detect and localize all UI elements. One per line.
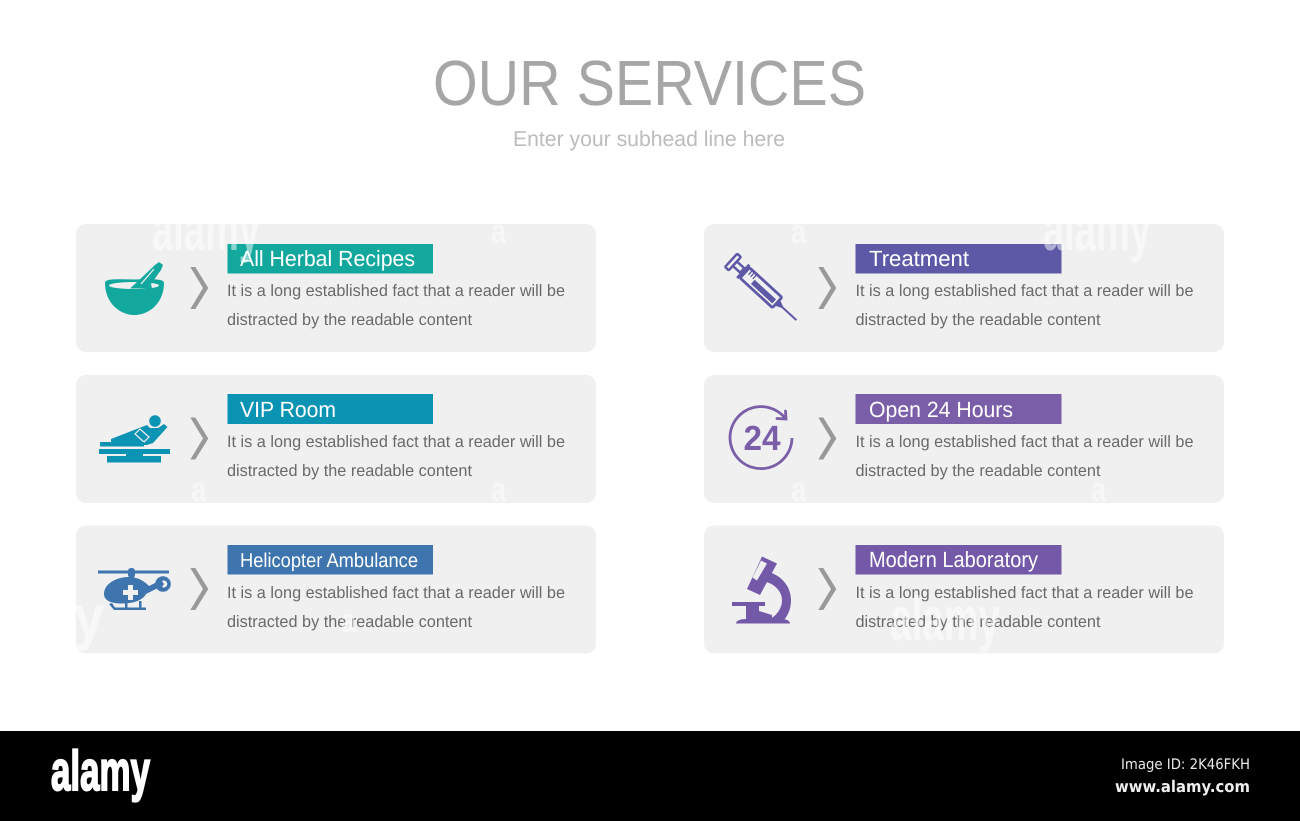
- title: OUR SERVICES: [433, 47, 866, 119]
- description: [856, 433, 1194, 480]
- watermarks: a: [491, 471, 507, 509]
- icon: 24 hours clock: 24: [744, 419, 781, 458]
- panel: all herbal recipes: [76, 224, 596, 352]
- watermarks: a: [1091, 471, 1107, 509]
- description: It is a long established fact that a reader will be: [856, 433, 1194, 451]
- chevron: [818, 568, 836, 610]
- description: distracted by the readable content: [856, 311, 1101, 329]
- label: open 24 hours: [856, 394, 1062, 424]
- watermarks: a: [341, 602, 357, 640]
- watermarks: a: [191, 471, 207, 509]
- description: distracted by the readable content: [856, 613, 1101, 631]
- description: It is a long established fact that a reader will be: [856, 282, 1194, 300]
- watermarks: [231, 244, 1062, 630]
- description: It is a long established fact that a reader will be: [227, 433, 565, 451]
- icon: mortar and pestle: [105, 262, 164, 315]
- label: helicopter ambulance: [228, 545, 433, 574]
- watermarks: a: [791, 471, 807, 509]
- description: distracted by the readable content: [227, 613, 472, 631]
- description: [227, 282, 565, 329]
- icon: helicopter: [98, 568, 171, 610]
- label: open 24 hours: Open 24 Hours: [869, 397, 1013, 422]
- website: www.alamy.com: [1115, 777, 1250, 796]
- chevron: [190, 418, 208, 460]
- watermarks: alamy: [1043, 195, 1151, 264]
- icon: patient bed: [99, 415, 170, 462]
- watermarks: y: [74, 583, 104, 652]
- description: It is a long established fact that a reader will be: [227, 584, 565, 602]
- label: helicopter ambulance: Helicopter Ambulance: [240, 550, 418, 572]
- panel: treatment: [704, 224, 1224, 352]
- subhead: Enter your subhead line here: [513, 127, 785, 151]
- description: [856, 584, 1194, 631]
- panel: vip room: [76, 375, 596, 503]
- label: modern laboratory: Modern Laboratory: [869, 547, 1038, 572]
- description: distracted by the readable content: [856, 462, 1101, 480]
- label: treatment: [856, 244, 1062, 274]
- description: distracted by the readable content: [227, 311, 472, 329]
- watermarks: alamy: [152, 195, 260, 264]
- label: vip room: [228, 394, 433, 424]
- description: [856, 282, 1194, 329]
- description: [227, 433, 565, 480]
- watermarks: alamy: [890, 585, 1000, 654]
- description: [227, 584, 565, 631]
- watermarks: a: [791, 213, 807, 251]
- icon: syringe: [725, 254, 802, 327]
- panel: open 24 hours: [704, 375, 1224, 503]
- panel: helicopter ambulance: [76, 526, 596, 654]
- description: distracted by the readable content: [227, 462, 472, 480]
- image id: Image ID: 2K46FKH: [1121, 757, 1250, 773]
- label: all herbal recipes: All Herbal Recipes: [240, 246, 415, 271]
- panel: modern laboratory: [704, 526, 1224, 654]
- chevron: [818, 267, 836, 309]
- icon: microscope: [732, 556, 791, 624]
- chevron: [190, 267, 208, 309]
- chevron: [818, 418, 836, 460]
- label: vip room: VIP Room: [240, 397, 336, 422]
- chevron: [190, 568, 208, 610]
- label: treatment: Treatment: [869, 246, 969, 271]
- description: It is a long established fact that a reader will be: [227, 282, 565, 300]
- logo: alamy: alamy: [51, 739, 150, 802]
- description: It is a long established fact that a reader will be: [856, 584, 1194, 602]
- icon: 24 hours clock: [730, 407, 792, 469]
- footer bar: [0, 731, 1300, 821]
- watermarks: a: [491, 213, 507, 251]
